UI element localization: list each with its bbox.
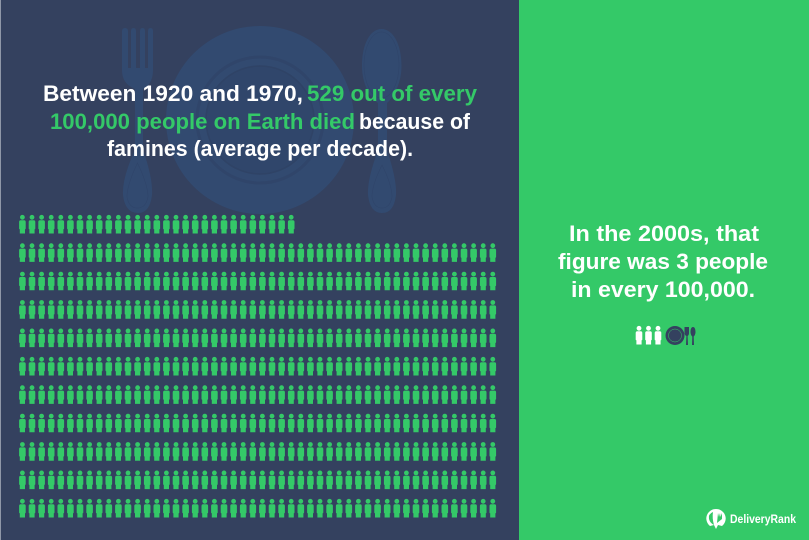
chart: 529 people pictogram: [19, 215, 496, 518]
logo: DeliveryRank: [706, 509, 796, 529]
text: 2000s comparison: in every 100,000.: [571, 277, 755, 302]
icon: three people and a plate: [636, 326, 696, 345]
heading: famine statistic: because of: [359, 109, 471, 134]
icon: spoon: [362, 29, 402, 213]
text: 2000s comparison: In the 2000s, that: [569, 221, 760, 246]
icon: plate and cutlery watermark: [122, 26, 402, 214]
text: logo wordmark: DeliveryRank: [730, 512, 796, 526]
icon: plate: [166, 26, 354, 214]
text: 2000s comparison: figure was 3 people: [558, 249, 768, 274]
row of 29 people: [19, 215, 294, 234]
panel: left navy background: [0, 0, 519, 540]
heading: famine statistic: Between 1920 and 1970,: [43, 81, 303, 106]
icon: small plate: [666, 326, 684, 345]
icon: small fork: [684, 327, 689, 345]
icon: small spoon: [690, 327, 696, 345]
heading: famine statistic: 529 out of every: [307, 81, 478, 106]
rows of 50 people: [19, 243, 496, 518]
icon: fork: [122, 28, 153, 213]
icon: three white people: [636, 326, 661, 344]
heading: famine statistic: famines (average per decade).: [107, 136, 413, 161]
panel: right green background: [519, 0, 809, 540]
icon: logo mark: [706, 509, 726, 529]
heading: famine statistic: 100,000 people on Earth died: [50, 109, 355, 134]
